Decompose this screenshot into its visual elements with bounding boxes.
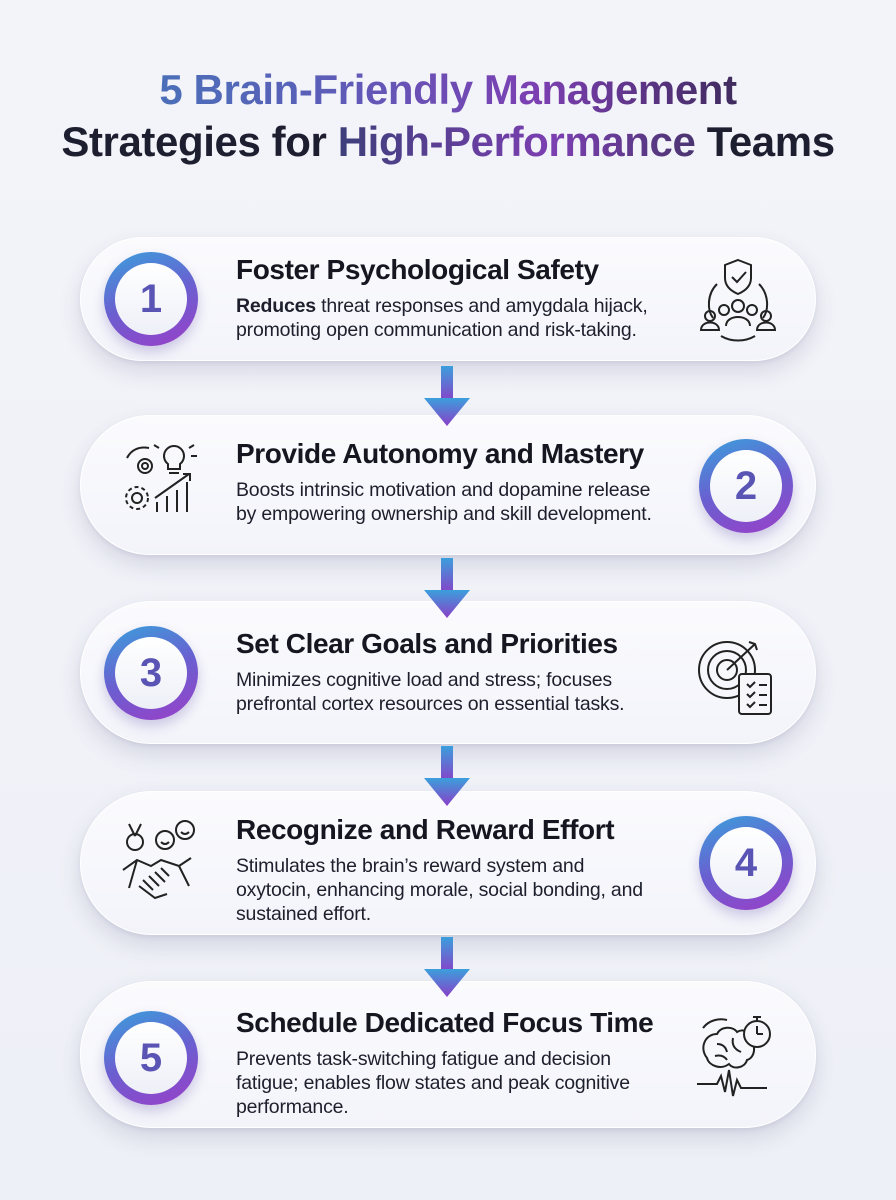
title: 5 Brain-Friendly Management: [159, 66, 737, 113]
arrow 3: [424, 746, 470, 806]
icon: target checklist: [698, 641, 772, 715]
text 1: promoting open communication and risk-taking.: [236, 319, 637, 341]
text 3: Set Clear Goals and Priorities: [236, 628, 618, 659]
number badge 3: [104, 626, 198, 720]
number badge 3: 3: [140, 651, 162, 695]
arrow 4: [424, 937, 470, 997]
arrow 1: [424, 366, 470, 426]
text 3: prefrontal cortex resources on essential tasks.: [236, 693, 624, 715]
number badge 4: 4: [735, 841, 757, 885]
text 5: performance.: [236, 1096, 348, 1118]
number badge 1: [104, 252, 198, 346]
panel: card 1: [80, 237, 816, 361]
title: [61, 66, 835, 165]
number badge 4: [699, 816, 793, 910]
text 5: Prevents task-switching fatigue and decision: [236, 1048, 611, 1070]
text 4: sustained effort.: [236, 903, 371, 925]
title: Strategies for High-Performance Teams: [61, 118, 835, 165]
icon: medal handshake smiles: [122, 820, 195, 900]
arrow 2: [424, 558, 470, 618]
text 1: [236, 254, 648, 341]
text 4: oxytocin, enhancing morale, social bonding, and: [236, 879, 643, 901]
panel: card 4: [80, 791, 816, 935]
icon: gears bulb chart: [125, 444, 197, 512]
number badge 2: 2: [735, 464, 757, 508]
text 2: [236, 438, 652, 525]
number badge 2: [699, 439, 793, 533]
text 5: fatigue; enables flow states and peak cognitive: [236, 1072, 630, 1094]
text 1: Foster Psychological Safety: [236, 254, 599, 285]
icon: team shield: [700, 258, 776, 342]
number badge 1: 1: [140, 277, 162, 321]
text 4: Recognize and Reward Effort: [236, 814, 614, 845]
text 2: by empowering ownership and skill development.: [236, 503, 652, 525]
panel: card 5: [80, 981, 816, 1128]
text 2: Provide Autonomy and Mastery: [236, 438, 644, 469]
text 3: [236, 628, 624, 715]
icon: brain stopwatch: [697, 1016, 771, 1096]
number badge 5: 5: [140, 1036, 162, 1080]
panel: card 2: [80, 415, 816, 555]
text 2: Boosts intrinsic motivation and dopamine release: [236, 479, 650, 501]
panel: card 3: [80, 601, 816, 744]
number badge 5: [104, 1011, 198, 1105]
text 5: Schedule Dedicated Focus Time: [236, 1007, 653, 1038]
text 5: [236, 1007, 653, 1118]
text 4: Stimulates the brain’s reward system and: [236, 855, 584, 877]
text 4: [236, 814, 643, 925]
text 1: Reduces threat responses and amygdala hijack,: [236, 295, 648, 317]
text 3: Minimizes cognitive load and stress; focuses: [236, 669, 612, 691]
